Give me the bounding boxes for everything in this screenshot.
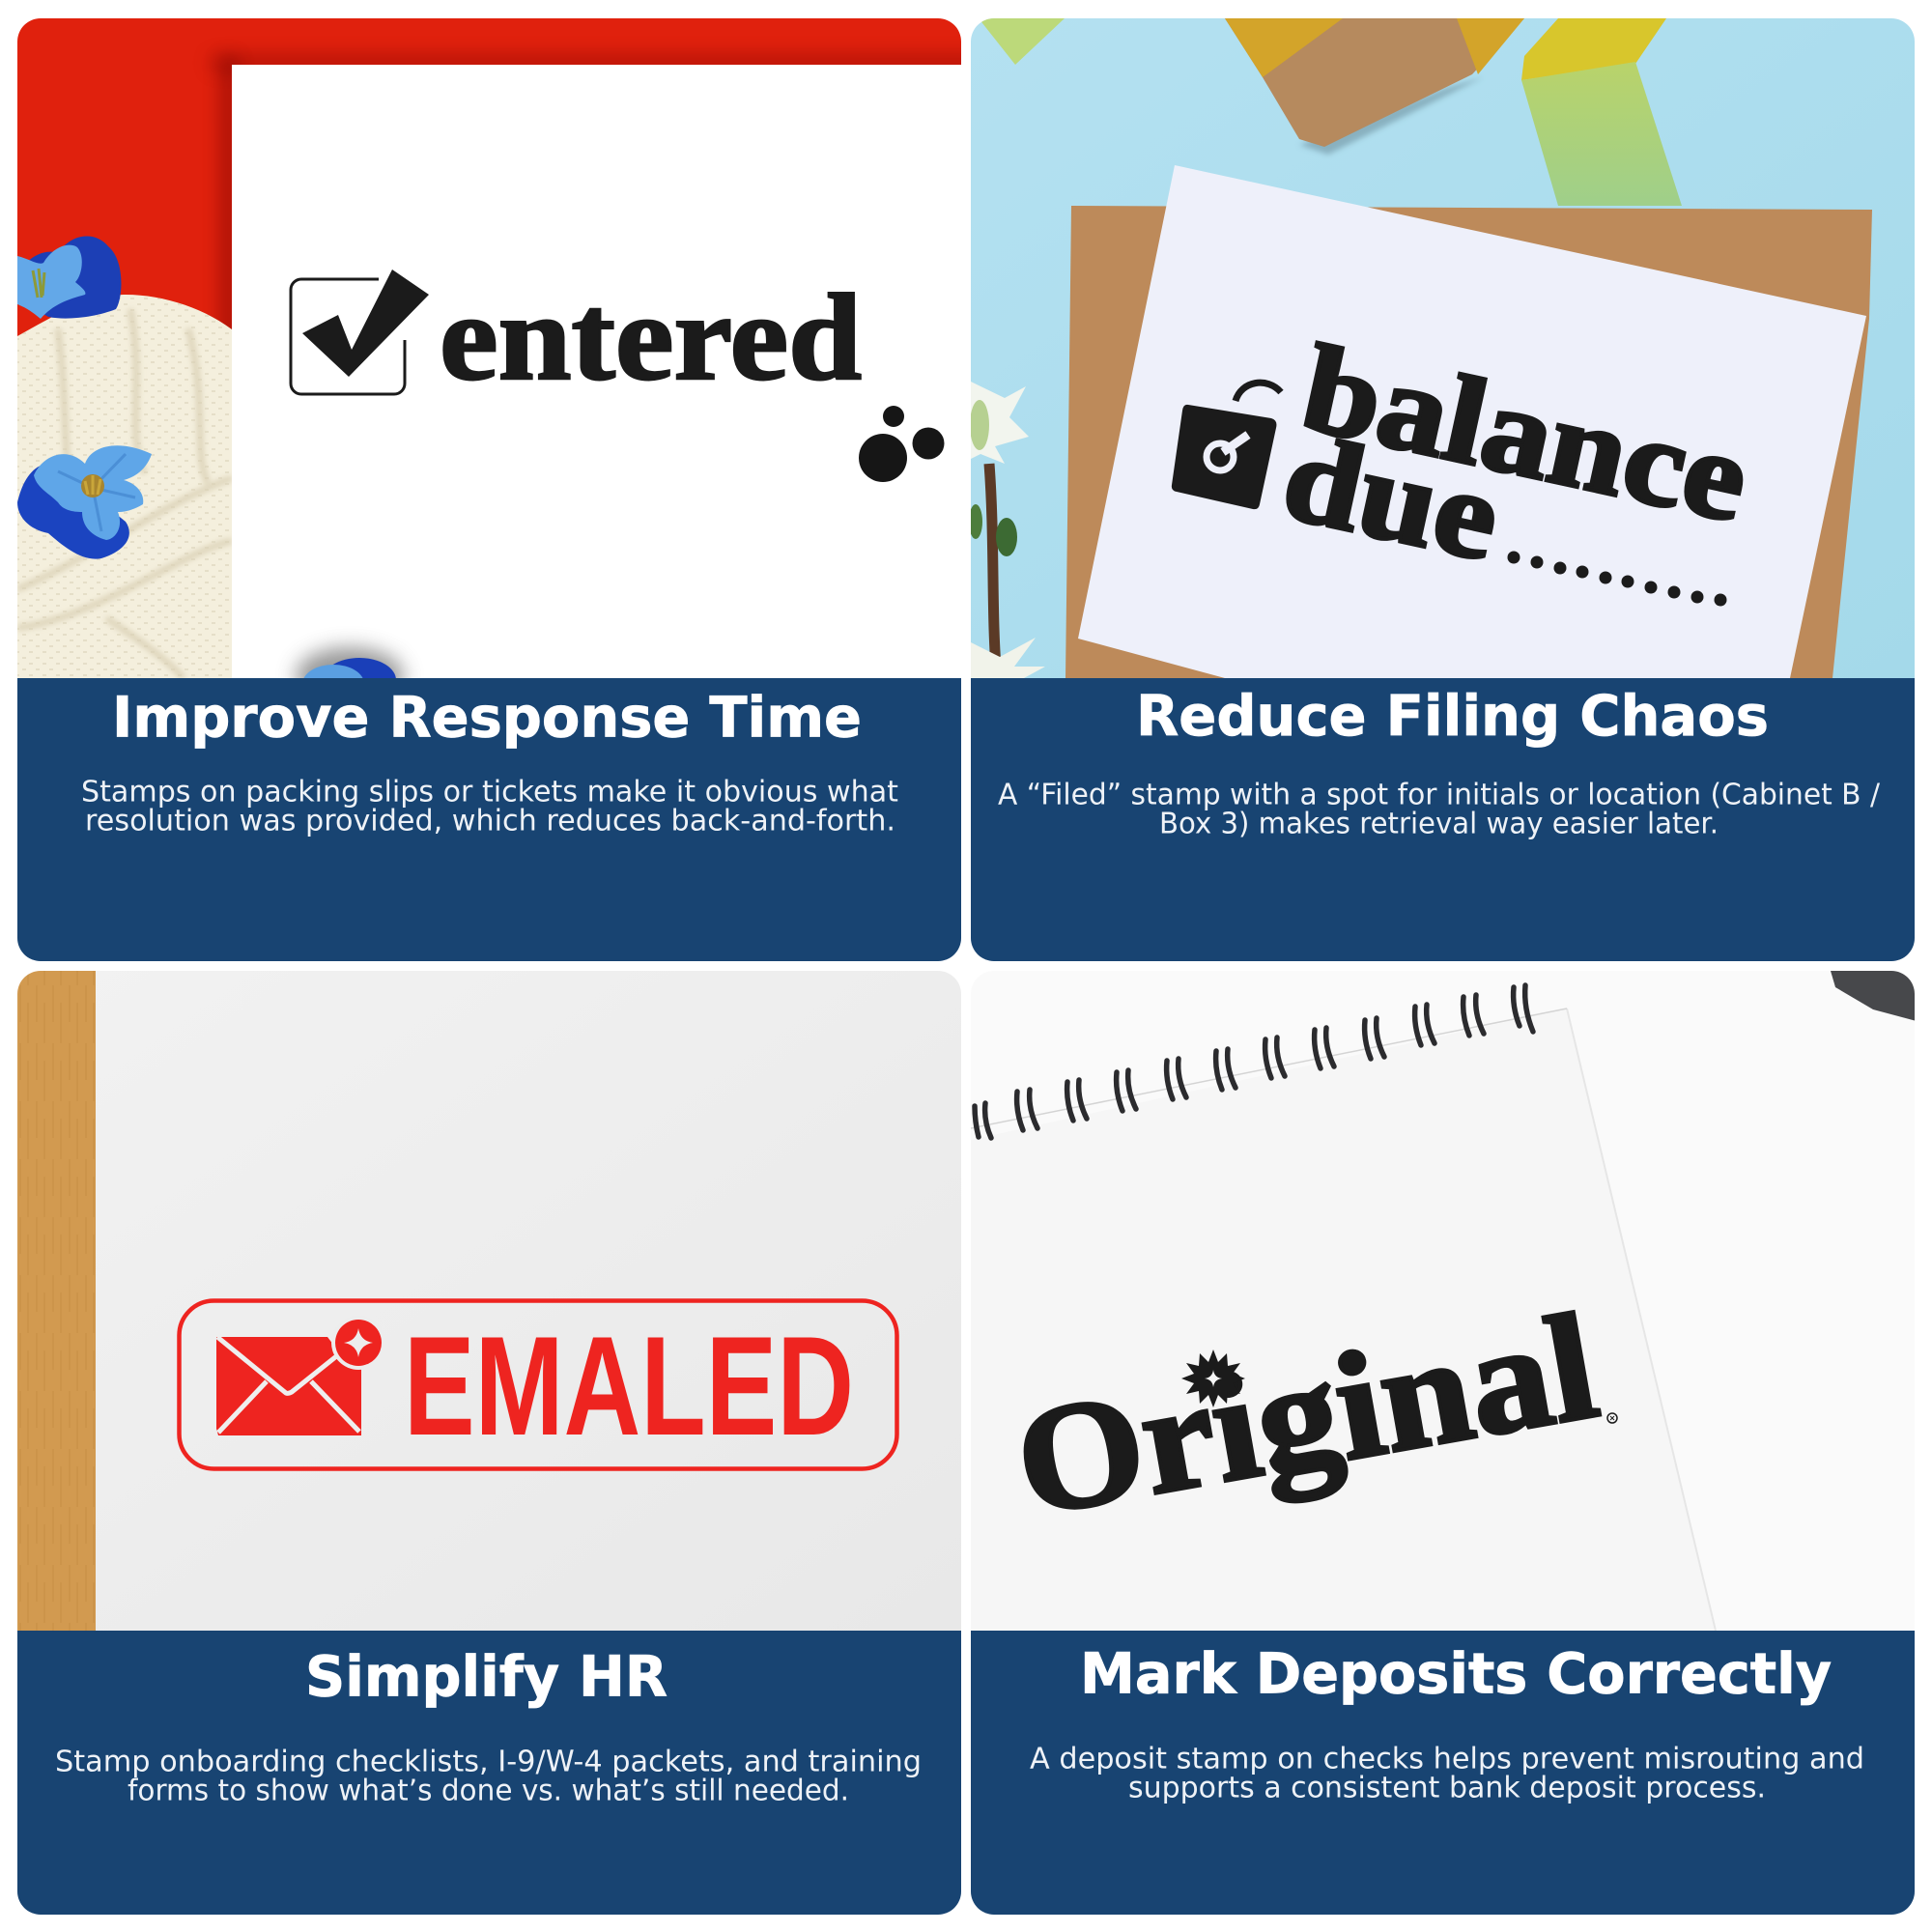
panel: simplify HR <box>17 971 961 1915</box>
decorative dots <box>859 406 945 482</box>
flower: bottom flower peeking <box>303 658 396 678</box>
branch with blossoms <box>969 382 1045 678</box>
stamp border <box>180 1300 896 1468</box>
device corner <box>1831 971 1917 1021</box>
icon: checkbox with check <box>291 270 429 394</box>
photo: red background with sweater and flowers <box>17 18 985 705</box>
description: Stamps on packing slips or tickets make it obvious what <box>81 775 898 810</box>
description: forms to show what’s done vs. what’s still needed. <box>128 1774 849 1808</box>
photo: gift, envelope, card <box>969 18 1917 678</box>
description: Stamp onboarding checklists, I-9/W-4 packets, and training <box>55 1745 922 1779</box>
heading: Mark Deposits Correctly <box>1080 1640 1832 1706</box>
panel: improve response time <box>17 18 985 961</box>
caption bar <box>17 678 961 961</box>
ribbon: yellow-green right <box>1521 18 1682 206</box>
stamp: emailed <box>180 1300 896 1468</box>
icon: open lock <box>1172 383 1281 509</box>
icon: envelope with sparkle <box>216 1316 385 1435</box>
stamp text: entered <box>440 269 862 406</box>
stamp: original <box>1005 1281 1617 1548</box>
ribbon: green left <box>979 18 1065 65</box>
gift box <box>1225 18 1524 155</box>
description: supports a consistent bank deposit process. <box>1128 1772 1766 1804</box>
stamp: entered <box>291 269 945 482</box>
registered mark <box>1607 1413 1617 1423</box>
stamp text: EMALED <box>404 1307 854 1464</box>
caption bar <box>971 678 1917 961</box>
heading: Improve Response Time <box>112 684 862 750</box>
heading: Simplify HR <box>305 1644 668 1710</box>
description: resolution was provided, which reduces back-and-forth. <box>85 804 895 838</box>
card <box>1078 165 1866 678</box>
panel: mark deposits correctly <box>971 971 1917 1915</box>
description <box>81 775 898 838</box>
stamp text: due: due <box>1272 408 1511 587</box>
dotted line <box>1507 551 1727 607</box>
flower: upper blue flower <box>17 237 121 319</box>
flower: partially hidden flower shadow <box>285 635 414 678</box>
panel: reduce filing chaos <box>969 18 1917 961</box>
description <box>57 1748 920 1801</box>
heading: Reduce Filing Chaos <box>1136 683 1769 749</box>
description: A “Filed” stamp with a spot for initials or location (Cabinet B / <box>998 779 1881 811</box>
description <box>998 779 1881 840</box>
paper card <box>232 65 966 683</box>
flower: lower blue flower <box>17 445 152 559</box>
stamp text: Original <box>1005 1281 1608 1548</box>
icon: star burst <box>1181 1350 1245 1407</box>
caption bar <box>971 1631 1917 1915</box>
description: A deposit stamp on checks helps prevent misrouting and <box>1030 1743 1864 1776</box>
photo: spiral notebook on white desk <box>971 971 1917 1631</box>
spiral binding <box>975 985 1533 1138</box>
photo: grey paper and wood edge <box>17 971 961 1631</box>
stamp: balance due <box>1171 340 1743 607</box>
envelope <box>1065 206 1872 678</box>
description: Box 3) makes retrieval way easier later. <box>1159 808 1719 840</box>
caption bar <box>17 1631 961 1915</box>
description <box>1030 1743 1864 1804</box>
stamp text: balance: balance <box>1292 319 1760 548</box>
